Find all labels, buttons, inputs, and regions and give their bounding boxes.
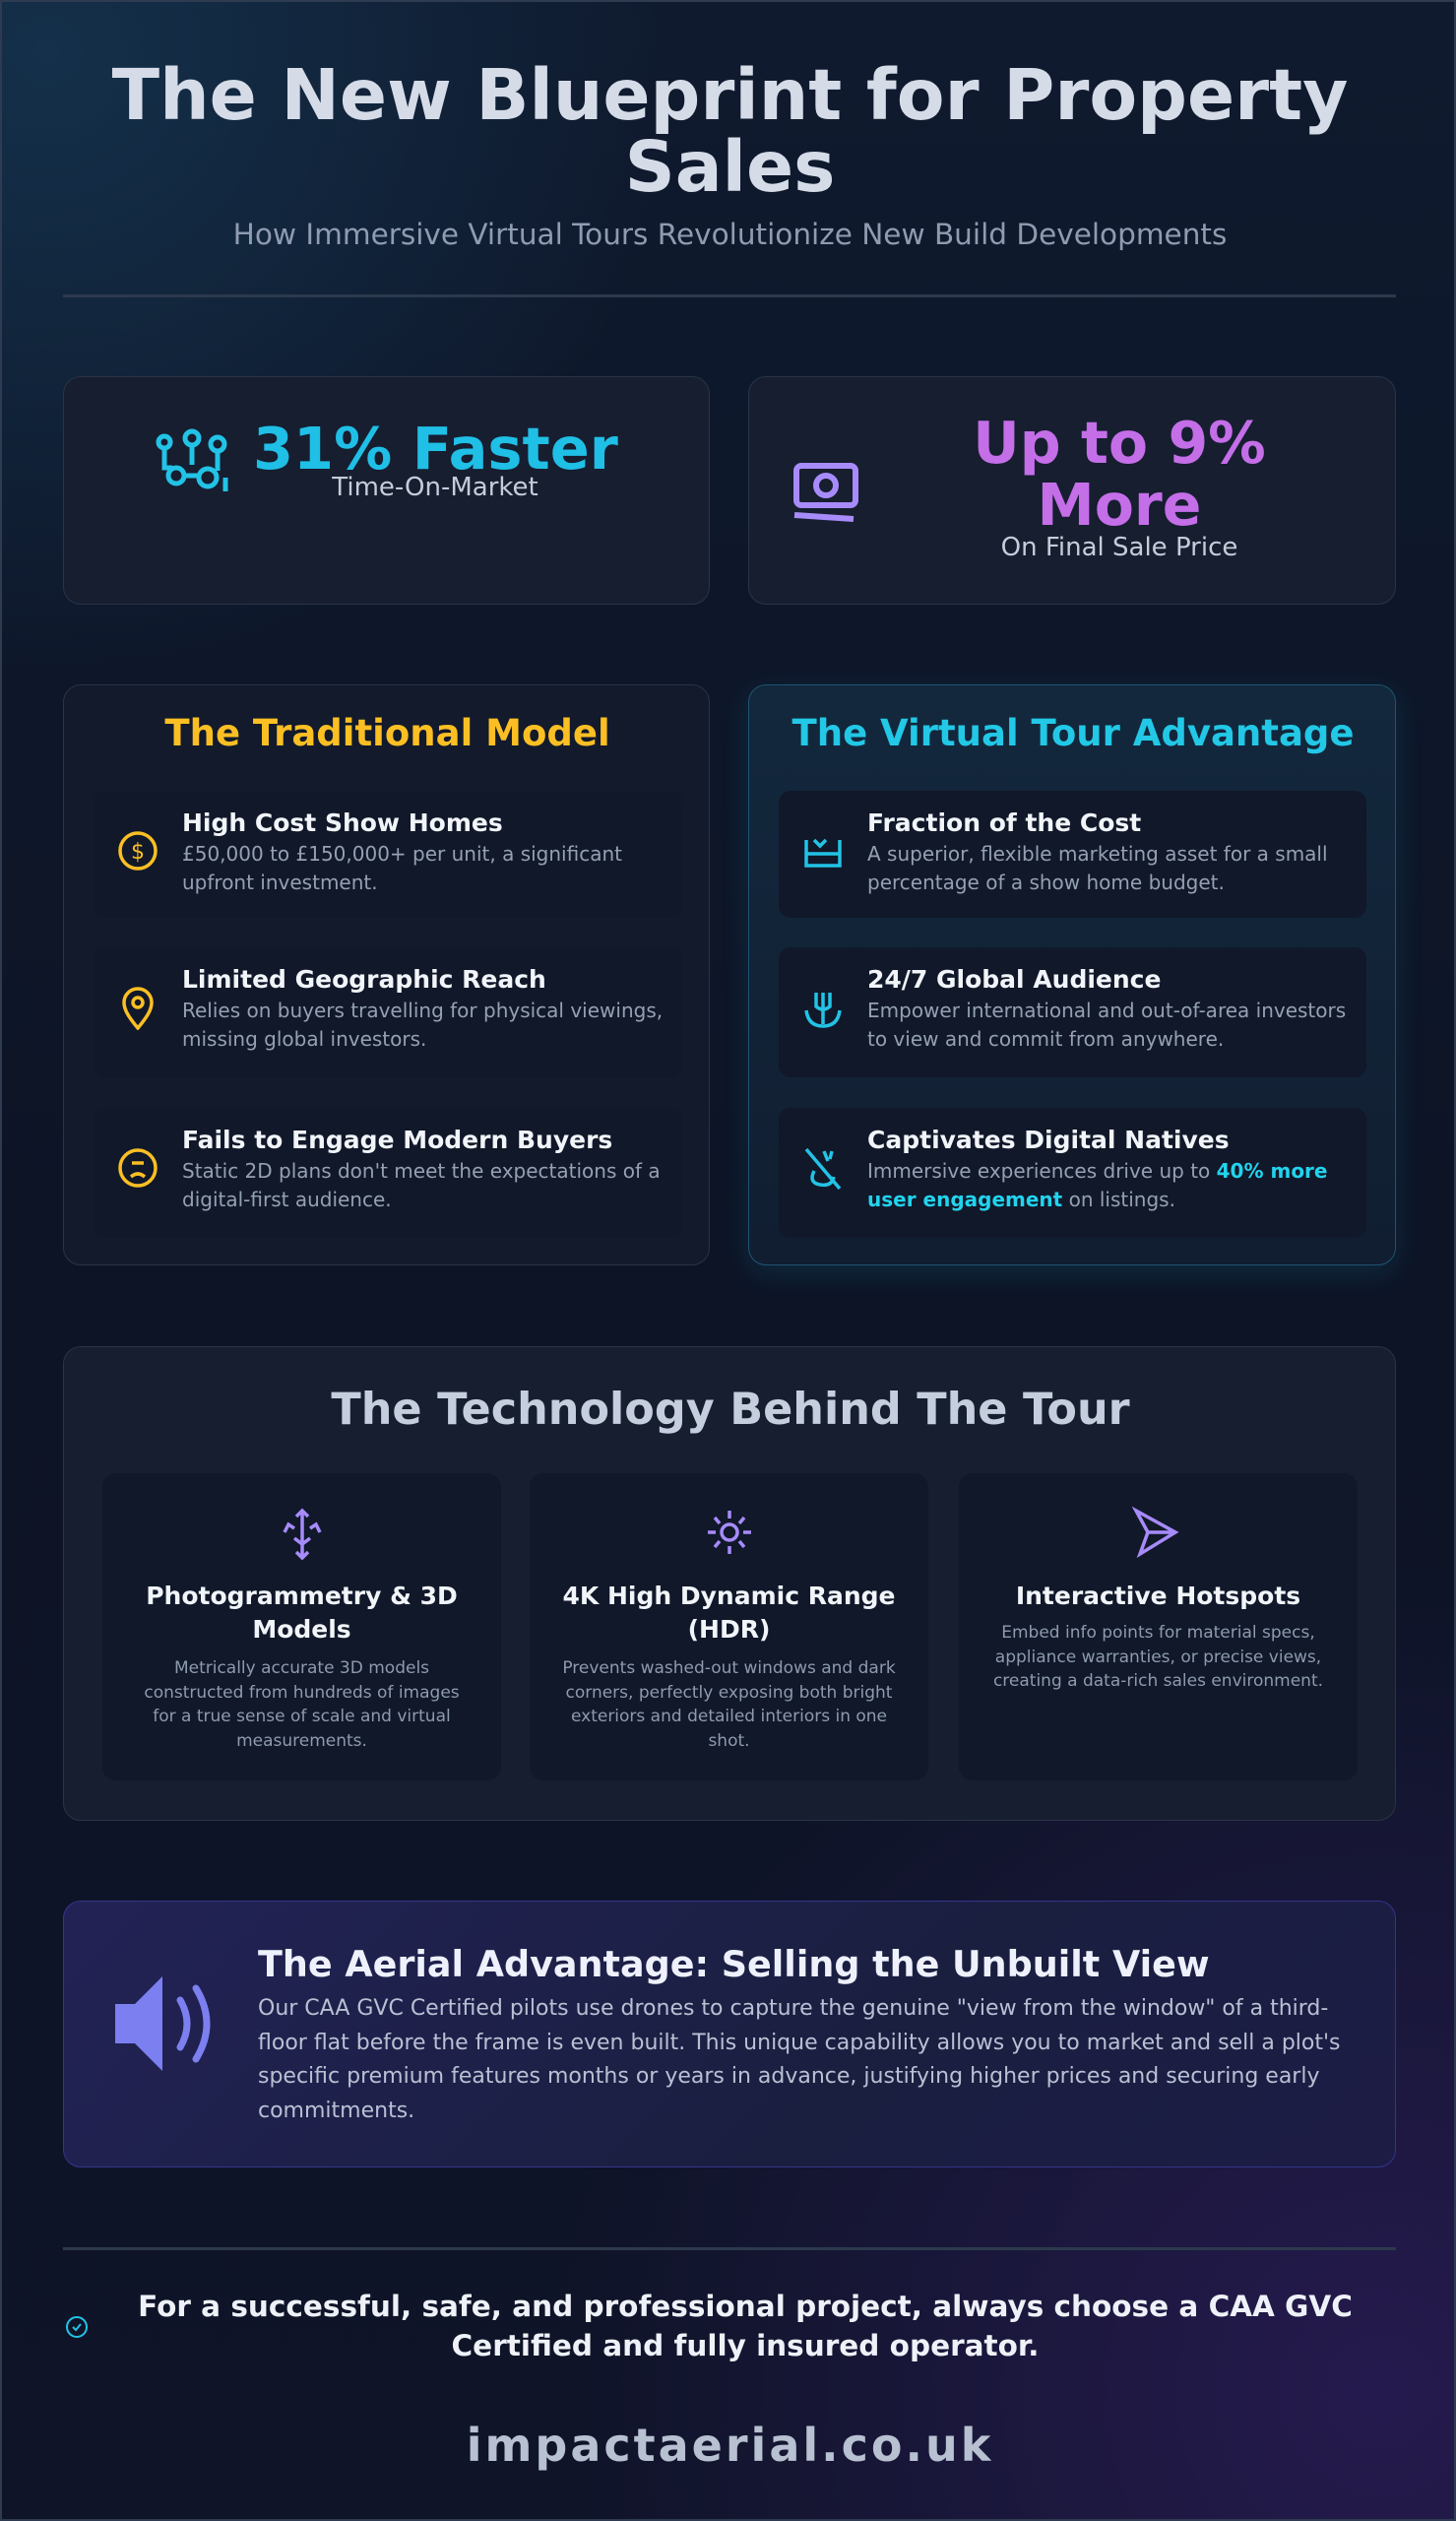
item: fraction cost: A superior, flexible marketing asset for a small percentage of a show home budget. xyxy=(867,842,1328,894)
panel: technology xyxy=(63,1346,1396,1821)
item: modern buyers: Fails to Engage Modern Buyers xyxy=(182,1126,612,1154)
tech card: hotspots: Interactive Hotspots xyxy=(1016,1582,1300,1610)
icon: network xyxy=(156,429,228,491)
item: modern buyers xyxy=(94,1108,683,1238)
item: high cost xyxy=(94,791,683,918)
item: global audience: 24/7 Global Audience xyxy=(867,965,1161,994)
item: geographic reach: Relies on buyers travelling for physical viewings, missing global investors. xyxy=(182,999,663,1051)
heading: The Aerial Advantage: Selling the Unbuilt View xyxy=(258,1943,1210,1985)
icon: tray xyxy=(804,839,842,868)
tech card: hotspots: Embed info points for material specs, appliance warranties, or precise views, creating a data-rich sales environment. xyxy=(993,1623,1323,1691)
stat value: Up to 9% xyxy=(973,410,1266,477)
panel: virtual tour advantage xyxy=(748,684,1396,1265)
footer statement: For a successful, safe, and professional project, always choose a CAA GVC Certified and fully insured operator. xyxy=(138,2290,1353,2362)
stat label: On Final Sale Price xyxy=(1001,533,1237,562)
stat card: 31% faster xyxy=(63,376,710,605)
icon: sun xyxy=(708,1511,751,1554)
icon: send xyxy=(1132,1507,1179,1558)
heading: The Technology Behind The Tour xyxy=(331,1385,1130,1435)
item: fraction cost: Fraction of the Cost xyxy=(867,808,1141,837)
item: global audience: Empower international and out-of-area investors to view and commit from anywhere. xyxy=(867,999,1346,1051)
title: The New Blueprint for Property xyxy=(112,54,1348,136)
item: digital natives xyxy=(779,1108,1366,1238)
tech card: hotspots xyxy=(959,1473,1358,1780)
callout: aerial advantage xyxy=(63,1901,1396,2167)
icon: face xyxy=(118,1148,158,1188)
website: impactaerial.co.uk xyxy=(467,2419,993,2472)
item: high cost: £50,000 to £150,000+ per unit, a significant upfront investment. xyxy=(182,842,622,894)
icon: money xyxy=(793,463,858,522)
tech card: photogrammetry: Metrically accurate 3D models constructed from hundreds of images for a true sense of scale and virtual measurements. xyxy=(144,1658,460,1751)
panel: traditional model xyxy=(63,684,710,1265)
item: geographic reach xyxy=(94,947,683,1077)
item: geographic reach: Limited Geographic Reach xyxy=(182,965,546,994)
tech card: hdr: 4K High Dynamic Range (HDR) xyxy=(563,1582,896,1644)
icon: dollar: $ xyxy=(131,840,145,865)
icon: check xyxy=(66,2316,88,2338)
icon: speaker xyxy=(115,1976,211,2071)
item: high cost: High Cost Show Homes xyxy=(182,808,503,837)
stat label: Time-On-Market xyxy=(332,473,538,502)
icon: pointer xyxy=(805,1148,841,1190)
item: fraction cost xyxy=(779,791,1366,918)
tech card: photogrammetry: Photogrammetry & 3D Models xyxy=(146,1582,458,1644)
item: digital natives: Captivates Digital Natives xyxy=(867,1126,1230,1154)
stat value: More xyxy=(1038,472,1201,539)
icon: pin xyxy=(122,987,154,1030)
tech card: hdr: Prevents washed-out windows and dark corners, perfectly exposing both bright exteriors and detailed interiors in one shot. xyxy=(562,1658,896,1751)
heading: The Virtual Tour Advantage xyxy=(791,712,1355,754)
heading: The Traditional Model xyxy=(164,712,610,754)
tech card: hdr xyxy=(530,1473,928,1780)
subtitle: How Immersive Virtual Tours Revolutionize New Build Developments xyxy=(233,218,1227,251)
item: global audience xyxy=(779,947,1366,1077)
item: digital natives: Immersive experiences drive up to 40% more user engagement on listings. xyxy=(867,1159,1327,1211)
stat value: 31% Faster xyxy=(253,415,618,483)
stat value xyxy=(973,410,1266,539)
icon: anchor xyxy=(804,993,842,1028)
icon: move arrows xyxy=(284,1509,321,1560)
title: Sales xyxy=(625,126,835,208)
stat card: up to 9% more xyxy=(748,376,1396,605)
body text: Our CAA GVC Certified pilots use drones to capture the genuine "view from the window" of a third-floor flat before the frame is even built. This unique capability allows you to market and sell a plot's specific premium features months or years in advance, justifying higher prices and securing early commitments. xyxy=(258,1996,1341,2123)
tech card: photogrammetry xyxy=(102,1473,501,1780)
item: modern buyers: Static 2D plans don't meet the expectations of a digital-first audience. xyxy=(182,1159,661,1211)
title xyxy=(112,54,1348,208)
icon: dollar xyxy=(118,831,158,871)
